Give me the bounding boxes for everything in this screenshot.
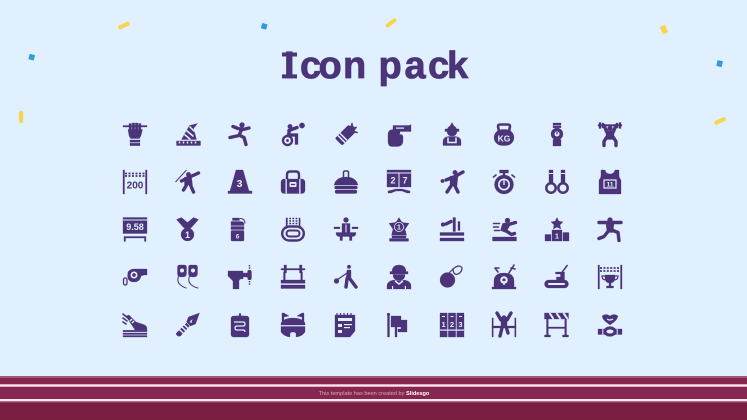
icon: discus thrower: [441, 170, 463, 192]
icon: runner breaking tape: [492, 313, 516, 337]
confetti: [19, 18, 726, 125]
icon: exercise bike: [492, 265, 516, 289]
icon: smart watch: [551, 123, 563, 146]
icon: stacked marker discs: [334, 171, 358, 194]
icon: podium with star: [545, 218, 569, 241]
icon: jersey 11: 11: [607, 182, 614, 188]
icon: scoreboard 2 7: [387, 170, 411, 193]
icon: clipboard: [231, 313, 249, 337]
icon: finish line 200: 200: [127, 180, 144, 192]
icon: medal 1: [176, 218, 198, 241]
icon: lockers 1 2 3: [440, 313, 464, 337]
icon: javelin thrower: [176, 170, 198, 192]
icon: treadmill: [544, 265, 568, 288]
icon: massage gun: [228, 265, 252, 289]
icon: person with cap: [387, 265, 411, 289]
icon: finish line trophy: [598, 265, 622, 289]
icon: wheelchair athlete: [283, 123, 305, 145]
icon: balance beam gymnast: [440, 218, 464, 241]
icon: ramp on ruler: [176, 124, 200, 146]
icon: champion belt: [598, 314, 622, 336]
icon: lockers 1 2 3: 1: [442, 320, 446, 329]
icon: jersey 11: [599, 170, 621, 194]
icon: person with visor: [443, 122, 461, 146]
icon: runner: [230, 122, 249, 144]
icon grid: [123, 122, 622, 337]
title: Icon pack: [284, 45, 469, 87]
icon: lunge figure: [599, 218, 621, 240]
icon: star trophy 1: [389, 218, 409, 241]
icon: kettlebell: KG: [498, 134, 511, 144]
icon: long jumper: [492, 218, 516, 241]
icon: knee pads: [178, 265, 198, 288]
icon: hammer ball with loop: [440, 266, 462, 288]
icon: water bottle 6: [231, 218, 245, 241]
icon: kettlebell: [494, 124, 514, 146]
icon: scoreboard 2 7: 7: [402, 176, 408, 186]
icon: striped hurdle: [544, 313, 568, 337]
icon: gymnast on pommel: [334, 218, 358, 240]
icon: podium with star: 1: [555, 234, 559, 240]
icon: flags: [387, 313, 407, 337]
icon: tilted bottle: [335, 123, 357, 145]
icon: sports bag: [281, 172, 305, 194]
icon: torch: [176, 313, 200, 336]
icon: whistle: [124, 269, 147, 285]
icon: lockers 1 2 3: 2: [450, 320, 454, 329]
icon: calendar sheet: [335, 313, 355, 337]
icon: running track: [282, 218, 304, 240]
icon: gym rings: [546, 170, 568, 193]
running track stripes: [0, 376, 747, 420]
icon: scoreboard 9.58: 9.58: [126, 222, 144, 232]
footer credit: This template has been created by Slidesgo: [319, 391, 430, 397]
icon: bench press: [281, 265, 305, 288]
icon: water bottle 6: 6: [236, 234, 240, 240]
icon: cone number 3: 3: [237, 178, 243, 190]
icon: lockers 1 2 3: 3: [458, 320, 462, 329]
icon: medal 1: 1: [185, 230, 190, 240]
icon: grip glove: [123, 123, 147, 146]
icon: running shoe: [123, 314, 147, 337]
icon: scoreboard 2 7: 2: [390, 176, 396, 186]
icon: scoreboard 9.58: [123, 218, 147, 242]
icon: hammer thrower: [334, 265, 356, 287]
icon: stopwatch: [494, 170, 514, 194]
icon: starting pistol: [388, 124, 411, 146]
icon: finish line 200: [123, 170, 147, 194]
icon: star trophy 1: 1: [397, 224, 401, 232]
icon: stadium: [281, 313, 305, 337]
icon: weightlifter: [598, 122, 622, 146]
icon: cone number 3: [228, 170, 252, 194]
